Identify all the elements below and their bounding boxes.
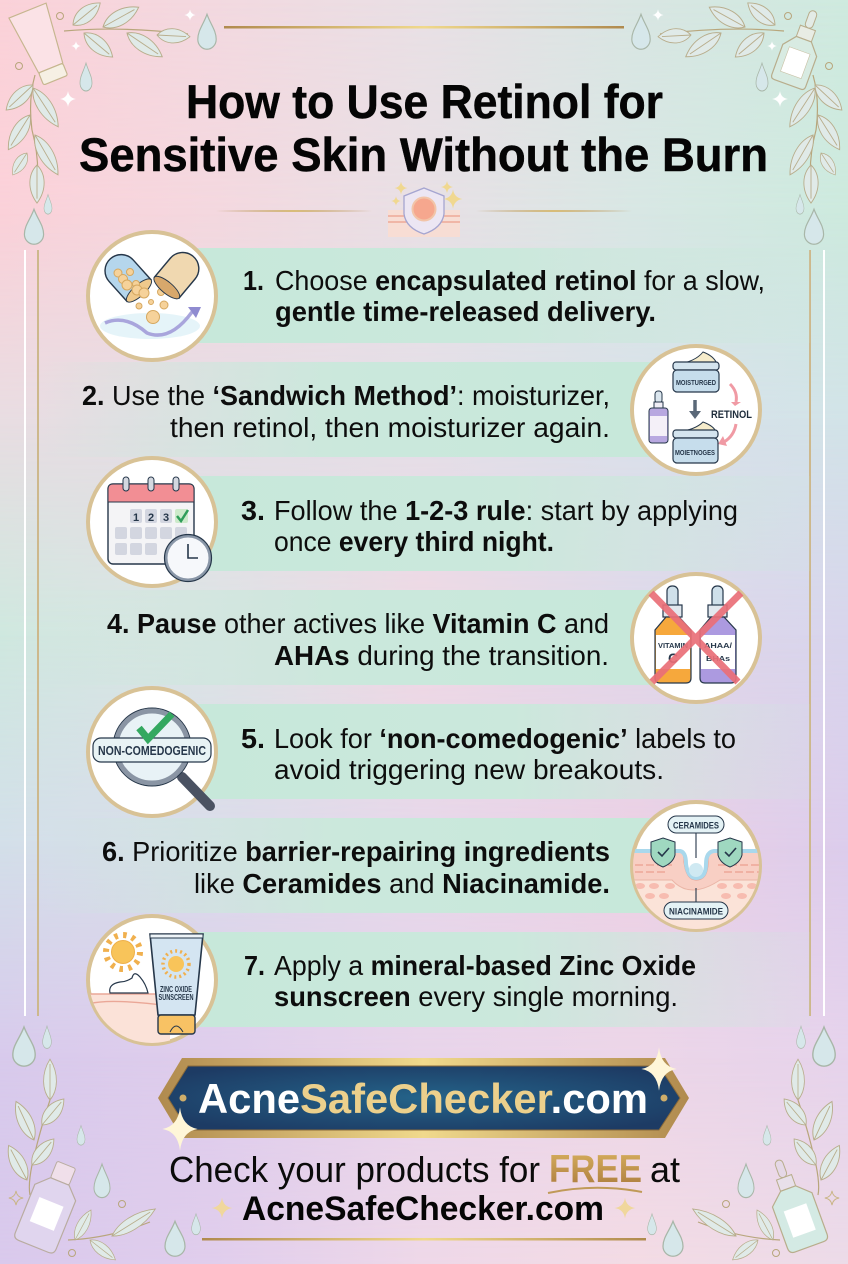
step 2 text: then retinol, then moisturizer again. <box>170 412 610 443</box>
icon: bottle bottom left <box>13 1157 87 1255</box>
icon: zinc oxide sunscreen <box>88 916 216 1045</box>
step 6 band <box>38 818 698 913</box>
icon: cream tube top left <box>9 3 74 88</box>
step 2 band <box>38 362 698 457</box>
icon: crossed out serums: C <box>668 650 678 666</box>
icon: dropper bottle bottom right <box>758 1153 829 1254</box>
icon: calendar and clock: 2 <box>148 512 154 524</box>
call to action <box>169 1148 680 1228</box>
step 2 text <box>82 380 610 443</box>
bottom left floral corner <box>2 1026 200 1264</box>
step 7 band <box>150 932 810 1027</box>
step 6 text <box>102 836 610 899</box>
step 3 band <box>150 476 810 571</box>
icon: zinc oxide sunscreen: SUNSCREEN <box>158 993 194 1002</box>
call to action: AcneSafeChecker.com <box>242 1190 604 1228</box>
step 3 text: 3. <box>241 495 265 526</box>
call to action: FREE <box>549 1148 642 1191</box>
icon: calendar and clock <box>88 458 216 586</box>
icon: crossed out serums <box>632 574 760 702</box>
step 1 text: 1. <box>243 265 264 296</box>
icon: non-comedogenic magnifier: NON-COMEDOGENIC <box>98 744 206 758</box>
icon: zinc oxide sunscreen: ZINC OXIDE <box>160 985 192 994</box>
icon: calendar and clock: 3 <box>163 512 169 524</box>
step 7 text: 7. <box>244 950 265 981</box>
call to action: Check your products for <box>169 1149 540 1190</box>
icon: sandwich method jars: MOISTURGED <box>676 378 716 387</box>
icon: crossed out serums: VITAMIN <box>658 641 688 650</box>
icon: skin barrier <box>630 802 762 940</box>
title: Sensitive Skin Without the Burn <box>79 128 768 181</box>
step 1 text: gentle time-released delivery. <box>275 296 656 327</box>
title <box>79 75 768 181</box>
icon: skin barrier: CERAMIDES <box>673 820 719 832</box>
step 6 text: like Ceramides and Niacinamide. <box>194 868 610 899</box>
title divider right <box>476 210 632 212</box>
top left floral corner <box>1 0 216 244</box>
step 1 text: Choose encapsulated retinol for a slow, <box>275 265 765 296</box>
step 4 text <box>107 608 609 671</box>
step 1 band <box>150 248 810 343</box>
step 2 text: 2. Use the ‘Sandwich Method’: moisturizer, <box>82 380 610 411</box>
step 5 text <box>241 723 736 785</box>
right border lines <box>809 250 825 1016</box>
step 3 text: once every third night. <box>274 526 554 557</box>
icon: shield over skin <box>388 181 463 237</box>
step 4 band <box>38 590 698 685</box>
icon: crossed out serums: AHAA/ <box>704 641 733 650</box>
step 5 text: 5. <box>241 723 265 754</box>
step 7 text: sunscreen every single morning. <box>274 981 678 1012</box>
icon: crossed out serums: BHAs <box>706 654 730 663</box>
step 7 text: Apply a mineral-based Zinc Oxide <box>274 950 696 981</box>
top right floral corner <box>632 0 847 244</box>
step 5 band <box>150 704 810 799</box>
brand banner: AcneSafeChecker.com <box>198 1075 648 1122</box>
icon: calendar and clock: 1 <box>133 512 139 524</box>
brand banner <box>158 1047 689 1151</box>
step 6 text: 6. Prioritize barrier-repairing ingredients <box>102 836 610 867</box>
icon: sandwich method jars: RETINOL <box>711 409 752 421</box>
icon: skin barrier: NIACINAMIDE <box>669 906 723 918</box>
step 1 text <box>243 265 765 327</box>
icon: non-comedogenic magnifier <box>88 688 216 816</box>
title: How to Use Retinol for <box>186 75 663 128</box>
step 3 text <box>241 495 738 557</box>
left border lines <box>24 250 39 1016</box>
call to action: at <box>650 1149 680 1190</box>
bottom right floral corner <box>648 1026 846 1264</box>
step 4 text: AHAs during the transition. <box>274 640 609 671</box>
icon: capsule releasing beads <box>88 232 216 360</box>
step 7 text <box>244 950 696 1012</box>
step 4 text: 4. Pause other actives like Vitamin C and <box>107 608 609 639</box>
icon: sandwich method jars: MOIETNOGES <box>675 448 715 457</box>
icon: sandwich method jars <box>632 346 760 474</box>
bottom gold line <box>202 1238 646 1240</box>
step 3 text: Follow the 1-2-3 rule: start by applying <box>274 495 738 526</box>
top gold line <box>224 26 624 28</box>
icon: dropper bottle top right <box>771 5 831 90</box>
step 5 text: avoid triggering new breakouts. <box>274 754 664 785</box>
title divider left <box>216 210 372 212</box>
step 5 text: Look for ‘non-comedogenic’ labels to <box>274 723 736 754</box>
